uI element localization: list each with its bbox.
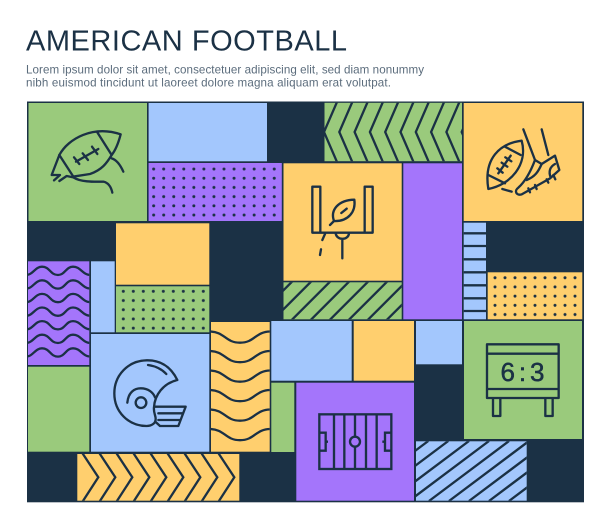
icon: scoreboard [487, 344, 559, 416]
panel: kicking football tile [464, 103, 582, 221]
panel: yellow dotted block [488, 272, 582, 319]
panel: scoreboard tile [464, 321, 582, 439]
panel: tall purple block [403, 163, 462, 319]
panel: blue block [149, 103, 267, 161]
icon: goal post with ball [312, 187, 373, 258]
panel: yellow block [116, 223, 209, 285]
panel: small blue rectangle [416, 321, 462, 364]
panel: purple dotted block [149, 163, 282, 221]
panel: yellow rectangle [354, 321, 414, 381]
intro text [26, 64, 424, 90]
icon: football field [319, 414, 391, 469]
panel: purple wave block [26, 261, 91, 365]
panel: football in hand tile [28, 103, 147, 221]
scoreboard digits: 6:3 [500, 357, 544, 387]
icon: football held in hand [52, 131, 123, 193]
mosaic panel [26, 102, 609, 502]
panel: yellow chevrons [77, 453, 239, 502]
panel: green striped block [284, 282, 402, 320]
panel: blue rectangle [271, 321, 352, 381]
panel: goal post tile [284, 163, 402, 281]
icon: football helmet [114, 360, 186, 426]
panel: helmet tile [91, 334, 209, 452]
panel: football field tile [296, 383, 414, 501]
panel: green chevrons [324, 102, 462, 162]
icon: boot kicking football [487, 129, 559, 195]
panel: thin blue block [91, 261, 115, 332]
panel: blue striped block [416, 441, 527, 501]
intro text: nibh euismod tincidunt ut laoreet dolore magna aliquam erat volutpat. [26, 76, 391, 90]
panel: blue ladder block [463, 223, 487, 319]
panel: small green block [271, 383, 294, 452]
title: AMERICAN FOOTBALL [26, 26, 347, 58]
panel: yellow wave block [209, 322, 271, 452]
panel: green block [28, 367, 89, 452]
panel: green dotted block [116, 286, 209, 332]
intro text: Lorem ipsum dolor sit amet, consectetuer adipiscing elit, sed diam nonummy [26, 64, 424, 76]
